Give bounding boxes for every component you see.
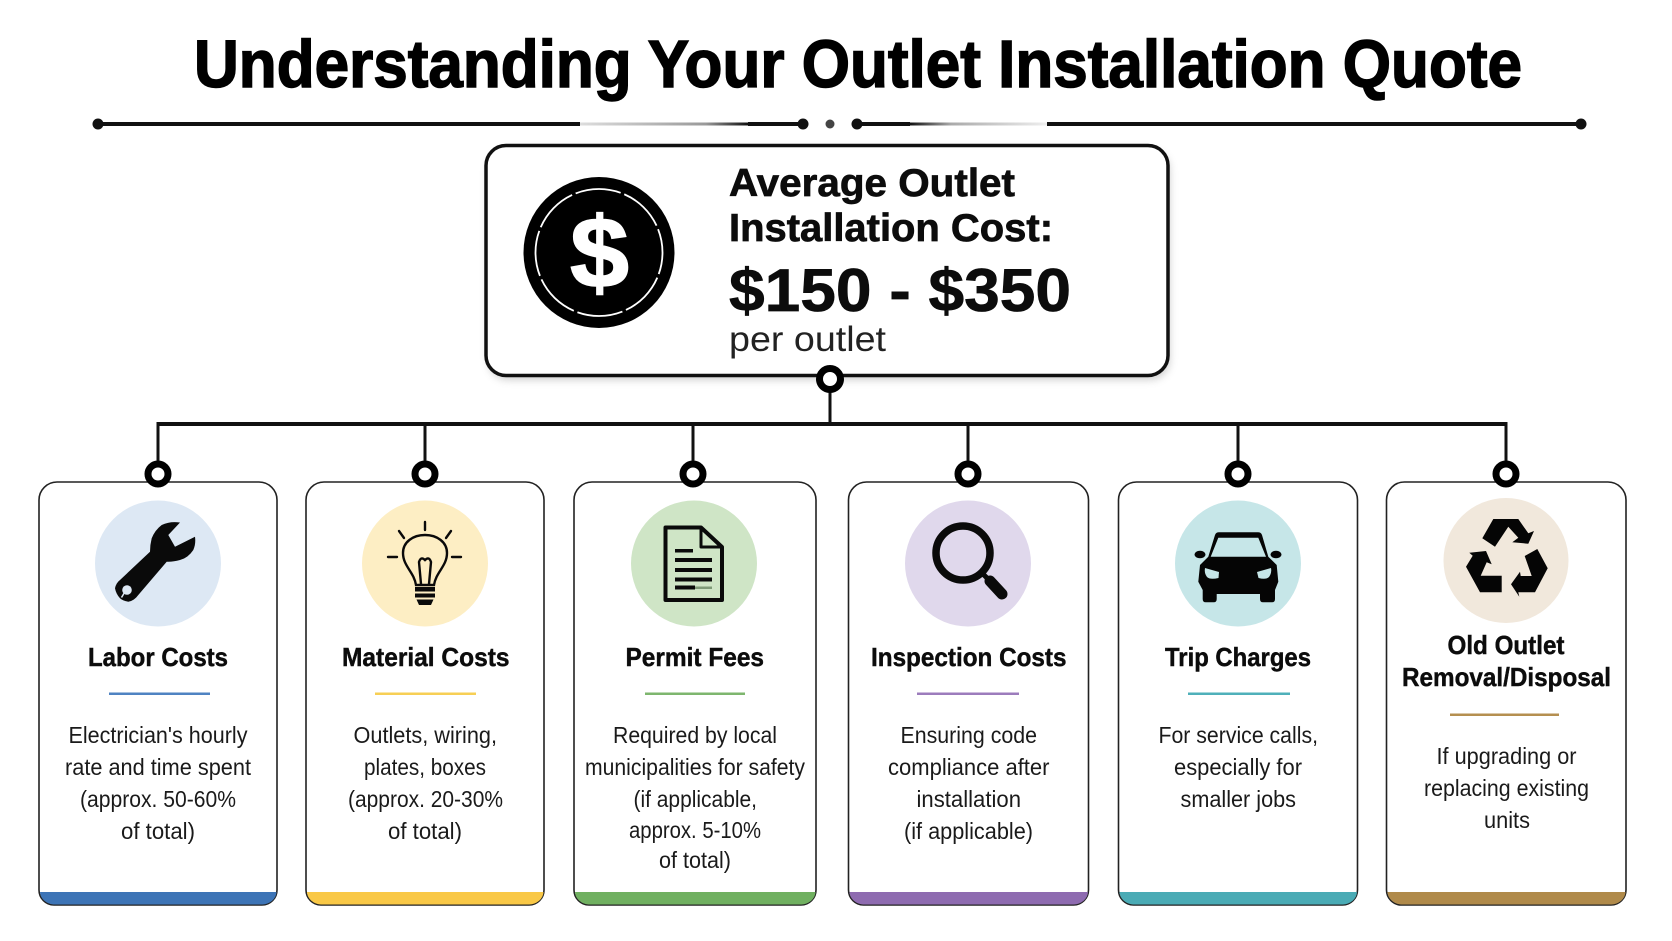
description: Required by local [613, 722, 777, 748]
icon: recycle [1444, 498, 1568, 623]
cost heading: Average Outlet [729, 162, 1015, 205]
icon: document [631, 500, 757, 626]
panel: old outlet removal [1386, 482, 1626, 905]
description: especially for [1174, 754, 1302, 780]
heading: Removal/Disposal [1402, 662, 1611, 692]
connector nodes [148, 368, 1516, 484]
icon: car [1175, 500, 1301, 626]
per outlet: per outlet [729, 320, 886, 359]
connector tree [156, 378, 1508, 474]
description: Ensuring code [900, 722, 1037, 748]
heading: Material Costs [342, 642, 510, 672]
description: Outlets, wiring, [354, 722, 497, 748]
heading: Inspection Costs [871, 642, 1066, 672]
icon: dollar coin: $ [570, 197, 629, 309]
description: of total) [121, 818, 195, 844]
heading: Permit Fees [626, 642, 764, 672]
icon: magnifying glass [905, 500, 1031, 626]
description: plates, boxes [364, 754, 486, 780]
description [1158, 722, 1318, 812]
panel: material costs [306, 482, 544, 905]
panel: average cost [486, 146, 1170, 380]
description: (approx. 50-60% [80, 786, 236, 812]
description [348, 722, 503, 844]
description: (if applicable, [634, 786, 757, 812]
description [585, 722, 805, 873]
description: compliance after [888, 754, 1050, 780]
description: municipalities for safety [585, 754, 805, 780]
description: of total) [659, 847, 731, 873]
description: If upgrading or [1436, 743, 1577, 769]
description: approx. 5-10% [629, 817, 761, 843]
description: For service calls, [1158, 722, 1318, 748]
panel: trip charges [1118, 482, 1358, 905]
panel: inspection costs [848, 482, 1088, 905]
panel: labor costs [39, 482, 277, 905]
description: installation [916, 786, 1021, 812]
icon: wrench [95, 500, 221, 626]
cost heading [729, 162, 1053, 250]
description [888, 722, 1050, 844]
heading: Labor Costs [88, 642, 228, 672]
icon: light bulb [362, 500, 488, 626]
description [1424, 743, 1589, 833]
panel: permit fees [574, 482, 816, 905]
description: (approx. 20-30% [348, 786, 503, 812]
description: (if applicable) [904, 818, 1033, 844]
description: units [1484, 807, 1530, 833]
description [65, 722, 252, 844]
heading: Old Outlet [1448, 630, 1565, 660]
description: of total) [388, 818, 462, 844]
description: smaller jobs [1180, 786, 1296, 812]
heading [1402, 630, 1611, 692]
description: replacing existing [1424, 775, 1589, 801]
cost heading: Installation Cost: [729, 207, 1053, 250]
title: Understanding Your Outlet Installation Quote [194, 27, 1522, 102]
price range: $150 - $350 [729, 257, 1071, 324]
description: rate and time spent [65, 754, 252, 780]
heading: Trip Charges [1165, 642, 1311, 672]
description: Electrician's hourly [68, 722, 248, 748]
icon: dollar coin [524, 177, 674, 328]
